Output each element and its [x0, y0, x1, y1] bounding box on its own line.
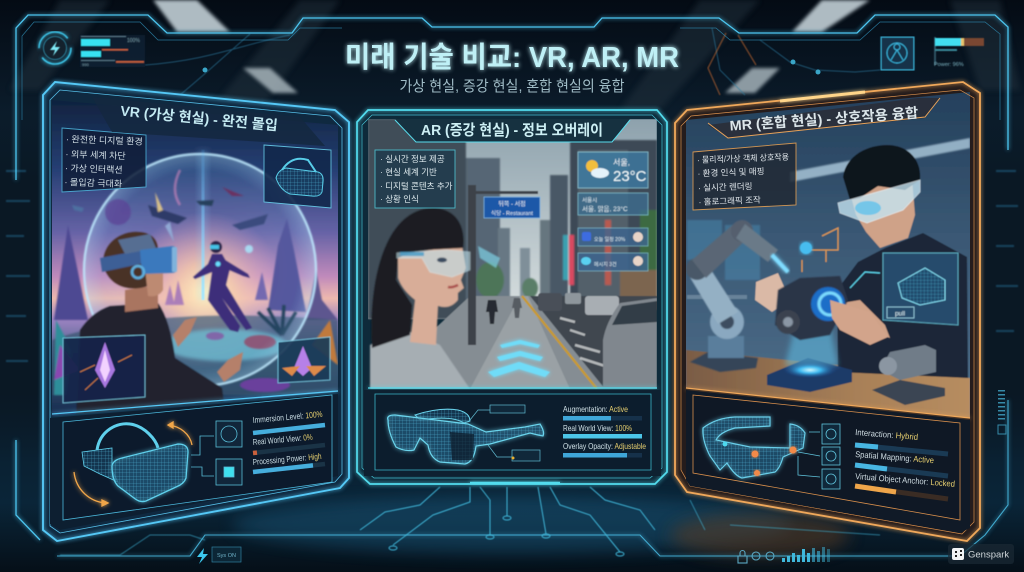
- bullet box: MR features: · 환경 인식 및 매핑: [697, 166, 765, 178]
- engine: [775, 276, 848, 340]
- weather card: 23°C: [613, 168, 647, 185]
- stats: Real World View: 0%: [252, 432, 313, 447]
- AR scene: city street: [368, 119, 657, 389]
- stats: [563, 404, 646, 458]
- AR data panel: [364, 390, 661, 476]
- info card: 서울, 맑음, 23°C: [582, 204, 628, 213]
- bullet box: VR features: [62, 128, 146, 192]
- bullet box: VR features: · 외부 세계 차단: [65, 148, 126, 161]
- VR title tab: [92, 97, 325, 146]
- stats: Immersion Level: 100%: [252, 409, 323, 425]
- stats: Interaction: Hybrid: [855, 427, 919, 442]
- panel: AR: [357, 110, 667, 484]
- status bars: 100%: [127, 38, 140, 44]
- holographic projector: [767, 325, 852, 392]
- stats: Augmentation: Active: [563, 404, 628, 414]
- bullet box: MR features: · 물리적/가상 객체 상호작용: [697, 152, 789, 165]
- panel: MR: [675, 82, 981, 541]
- AR frame lines: [357, 110, 667, 484]
- woman with AR glasses: [370, 208, 500, 389]
- street sign: 식당 - Restaurant: [491, 209, 533, 217]
- stats: Overlay Opacity: Adjustable: [563, 441, 646, 451]
- bullet box: AR features: · 디지털 콘텐츠 추가: [380, 181, 453, 191]
- VR data panel: [50, 394, 338, 530]
- stats: [252, 409, 325, 472]
- icon: MR goggles wireframe: [703, 417, 805, 478]
- status bars: [80, 35, 145, 67]
- watermark: Genspark: [948, 544, 1014, 564]
- panel: VR: [43, 82, 349, 541]
- holographic sphere: [84, 150, 316, 386]
- hologram arm sketch: [800, 228, 838, 272]
- bullet box: VR features: · 몰입감 극대화: [64, 176, 122, 189]
- icon boxes: [798, 424, 840, 489]
- small machine: [872, 345, 945, 405]
- stats: [855, 427, 956, 499]
- notification cards: [578, 228, 648, 271]
- bullet box: VR features: · 완전한 디지털 환경: [66, 133, 143, 147]
- info card: [578, 193, 648, 215]
- AR title tab: AR (증강 현실) - 정보 오버레이: [421, 122, 603, 139]
- top left status hud: [39, 32, 145, 67]
- flying ships: [72, 170, 268, 253]
- bullet box: AR features: [375, 150, 455, 208]
- street sign: 뒤쪽 - 서점: [498, 200, 526, 208]
- bullet box: MR features: · 실시간 렌더링: [698, 181, 753, 193]
- icon boxes: [191, 421, 242, 485]
- callout: VR headset hologram: [264, 145, 331, 208]
- glasses callouts: [470, 405, 540, 461]
- bottom right icons and equaliser: [738, 547, 830, 563]
- AR title tab: [395, 119, 630, 142]
- bullet box: MR features: [693, 143, 796, 210]
- VR scene: virtual world: [50, 95, 342, 420]
- MR title tab: [708, 98, 940, 138]
- hologram: flower: [278, 337, 330, 383]
- bullet box: VR features: · 가상 인터랙션: [65, 163, 123, 175]
- info card: 서울시: [582, 196, 597, 204]
- hologram: engine schematic: [883, 253, 958, 325]
- stats: Real World View: 100%: [563, 423, 632, 433]
- circuit traces: [60, 487, 880, 556]
- watermark: Genspark: Genspark: [968, 550, 1009, 560]
- bullet box: AR features: · 현실 세계 기반: [380, 167, 437, 177]
- AR navigation chevrons: [488, 340, 550, 377]
- top right status hud: [881, 37, 984, 70]
- person with headset: [76, 232, 243, 418]
- notification cards: 오늘 일정 20%: [594, 236, 626, 243]
- title: 미래 기술 비교: VR, AR, MR: [345, 41, 679, 74]
- VR title tab: VR (가상 현실) - 완전 몰입: [120, 103, 278, 133]
- MR frame lines: [675, 82, 980, 541]
- person with MR goggles: [755, 145, 968, 378]
- weather card: 서울,: [613, 158, 630, 167]
- status bars: 990: [82, 62, 89, 67]
- icon: energy ring: [39, 32, 71, 64]
- VR frame lines: [43, 82, 349, 541]
- icon: AR glasses wireframe: [388, 409, 544, 464]
- stats: Virtual Object Anchor: Locked: [855, 471, 956, 489]
- level meter: Power: 96%: [934, 62, 964, 68]
- hologram: crystal: [63, 335, 145, 403]
- MR title tab: MR (혼합 현실) - 상호작용 융합: [729, 104, 919, 134]
- weather card: [578, 152, 648, 188]
- icon: VR headset wireframe: [82, 424, 188, 502]
- MR data panel: [686, 390, 970, 533]
- icon: rotation arrows: [74, 422, 192, 506]
- bottom left icon: bolt and label: [197, 547, 241, 564]
- street sign: [484, 197, 540, 218]
- bullet box: MR features: · 홀로그래픽 조작: [698, 195, 761, 207]
- icon: scan target: [881, 37, 914, 70]
- goggles sensors: [722, 442, 796, 476]
- avatar figure: [193, 241, 252, 332]
- bullet box: AR features: · 상황 인식: [380, 194, 419, 204]
- MR scene: workshop: [684, 90, 974, 420]
- bullet box: AR features: · 실시간 정보 제공: [380, 154, 445, 164]
- right edge hud icons: [998, 390, 1006, 434]
- stats: Spatial Mapping: Active: [855, 449, 935, 465]
- bottom left icon: bolt and label: Sys ON: [217, 553, 236, 559]
- subtitle: 가상 현실, 증강 현실, 혼합 현실의 융합: [400, 78, 625, 95]
- hologram: engine schematic: pull: [895, 310, 906, 318]
- stats: Processing Power: High: [252, 451, 322, 467]
- robot arm: [686, 220, 788, 372]
- notification cards: 메시지 3건: [594, 261, 617, 268]
